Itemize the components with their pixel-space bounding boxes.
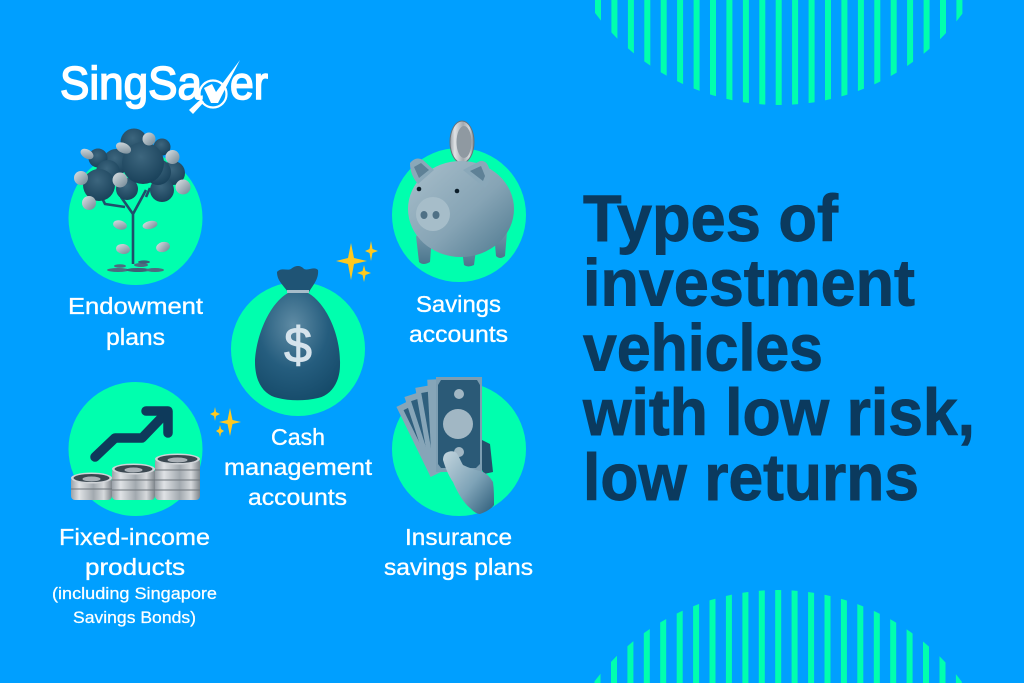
circle: insurance	[392, 382, 526, 516]
circle: fixed income	[68, 382, 202, 516]
label: fixed-income products: Fixed-income	[59, 524, 210, 550]
logo: SingSaver: SingSa	[60, 57, 202, 109]
striped semicircle: bottom	[594, 585, 962, 683]
label: savings accounts	[409, 291, 508, 347]
title: Types of	[583, 181, 839, 255]
striped semicircle: top	[595, 0, 962, 110]
icon: hand with banknotes	[396, 377, 494, 514]
logo: SingSaver: er	[230, 57, 268, 109]
title: low returns	[583, 440, 919, 514]
circle: savings	[392, 148, 526, 282]
label: insurance savings plans: savings plans	[384, 554, 533, 580]
title: vehicles	[583, 310, 823, 384]
label: endowment plans: Endowment	[68, 293, 204, 319]
label: insurance savings plans: Insurance	[405, 524, 512, 550]
panel: fixed-income products	[52, 382, 217, 627]
label: endowment plans	[68, 293, 204, 350]
label: savings accounts: Savings	[416, 291, 501, 317]
circle: cash management	[231, 282, 365, 416]
icon: rising arrow	[95, 411, 168, 457]
panel: insurance savings plans	[384, 377, 533, 580]
label: fixed-income products: (including Singapore	[52, 584, 217, 603]
icon: money tree	[74, 128, 190, 272]
icon: piggy bank	[408, 121, 514, 266]
title	[582, 181, 975, 514]
label: fixed-income products: products	[85, 554, 185, 580]
label: cash management accounts: management	[224, 454, 373, 480]
icon: money bag: $	[284, 317, 312, 373]
label: fixed-income products	[52, 524, 217, 627]
icon: sparkles upper	[336, 241, 378, 282]
label: cash management accounts: accounts	[248, 484, 347, 510]
icon: sparkles lower	[210, 407, 241, 437]
circle: endowment	[68, 151, 202, 285]
panel: cash management accounts	[224, 266, 373, 510]
label: cash management accounts: Cash	[271, 424, 325, 450]
logo: SingSaver	[60, 57, 268, 114]
panel: endowment plans	[68, 128, 204, 350]
label: cash management accounts	[224, 424, 373, 510]
label: endowment plans: plans	[106, 324, 165, 350]
label: fixed-income products: Savings Bonds)	[73, 608, 196, 627]
label: savings accounts: accounts	[409, 321, 508, 347]
panel: savings accounts	[392, 121, 526, 347]
title: with low risk,	[582, 375, 975, 449]
label: insurance savings plans	[384, 524, 533, 580]
icon: money bag	[255, 266, 340, 400]
title: investment	[583, 246, 915, 320]
icon: coin stacks	[71, 454, 200, 500]
